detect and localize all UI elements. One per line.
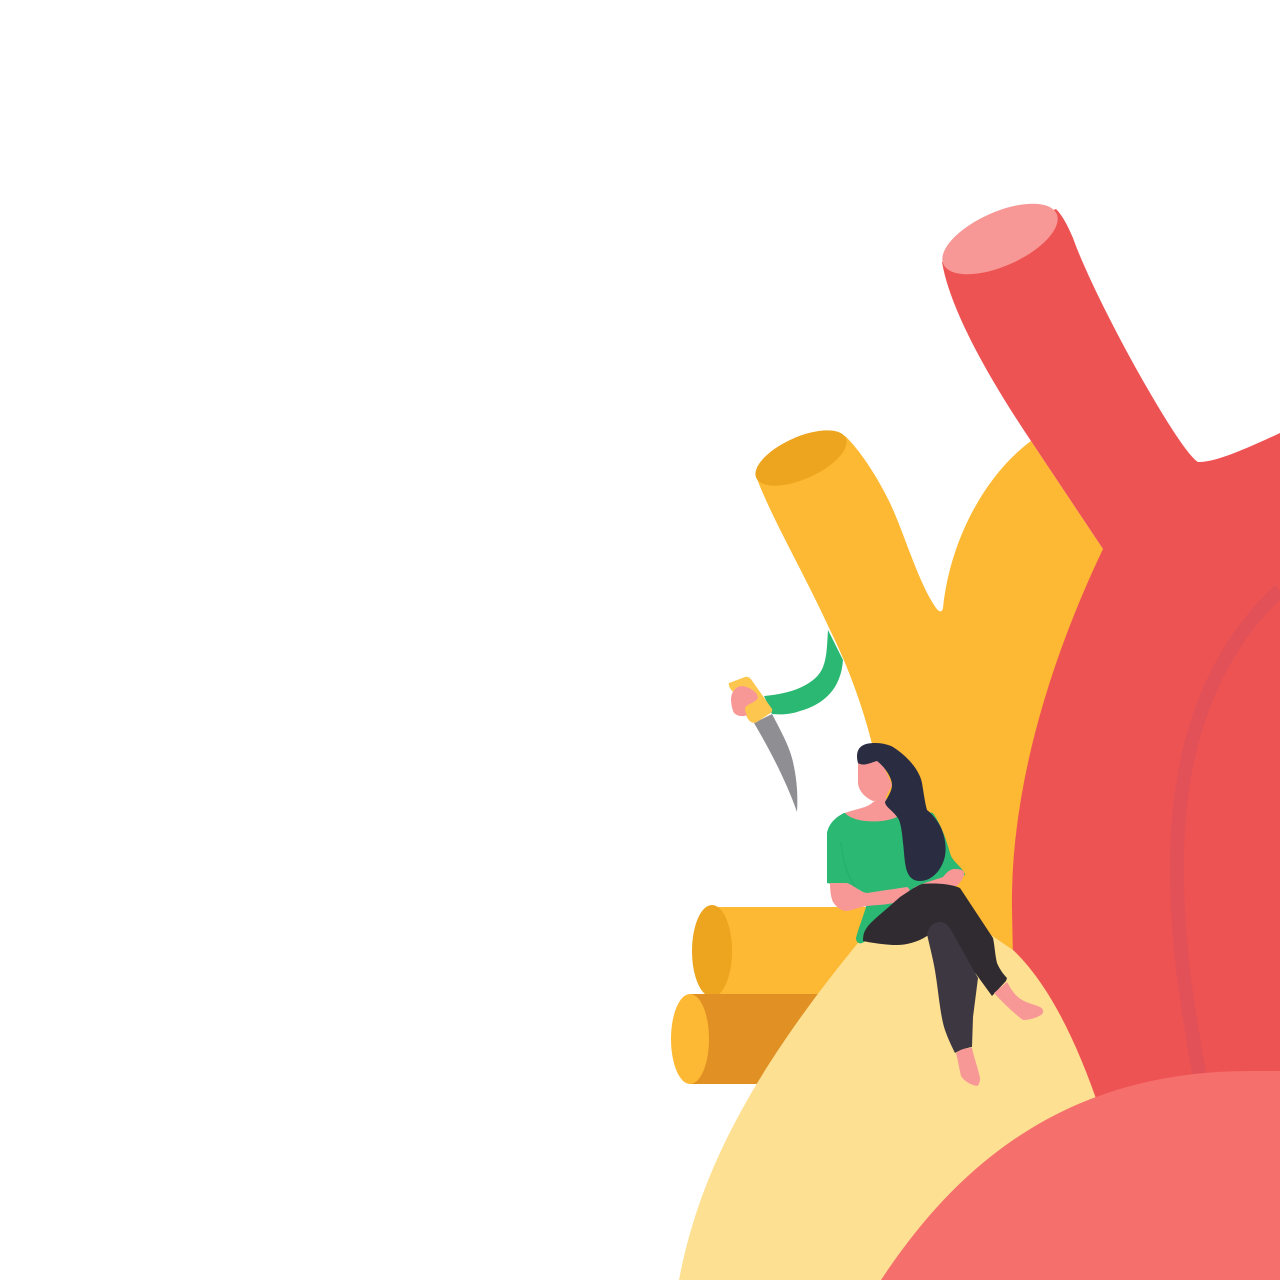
neck and collar (845, 796, 897, 821)
knife handle (729, 677, 772, 723)
front leg (863, 883, 1007, 996)
artery opening (748, 419, 854, 497)
front foot (994, 982, 1043, 1020)
pale yellow heart lobe (679, 904, 1100, 1280)
lower tube (671, 994, 840, 1084)
yellow artery (748, 419, 1103, 965)
stacked tubes (671, 905, 882, 1084)
near forearm (830, 883, 910, 911)
knife blade (754, 714, 797, 812)
far hand (913, 869, 964, 888)
hand (731, 686, 758, 716)
upper tube (692, 905, 882, 997)
vessel shading line (1177, 590, 1280, 1090)
red aorta and heart body (932, 189, 1280, 1110)
hair (857, 743, 946, 881)
coral heart lobe (881, 1071, 1280, 1280)
torso (827, 806, 965, 943)
raised arm sleeve (764, 630, 843, 714)
back leg (927, 922, 978, 1053)
figure: woman sitting (729, 630, 1043, 1086)
aorta opening (932, 189, 1068, 289)
handle front edge (745, 697, 772, 722)
shirt fold (841, 842, 855, 887)
back foot (956, 1048, 980, 1086)
face (858, 758, 892, 801)
